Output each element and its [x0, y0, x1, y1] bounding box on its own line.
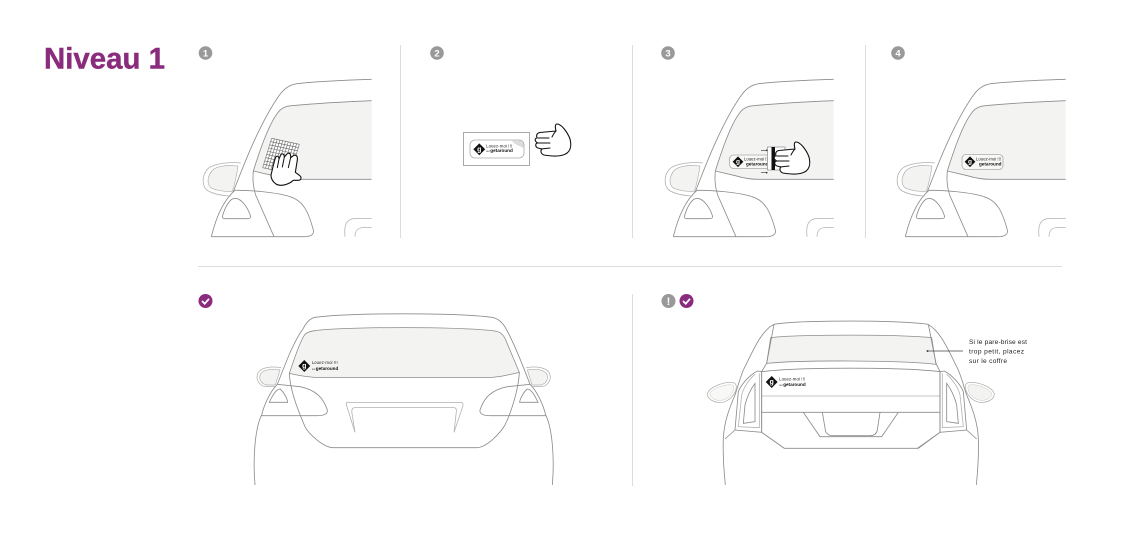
- small rear car illustration: [707, 321, 994, 485]
- sticker sheet: [464, 132, 530, 166]
- step 2 hand: [535, 124, 571, 156]
- step 3 panel: [661, 46, 834, 237]
- trunk logo: g: [770, 379, 774, 386]
- step 4 sticker: [962, 154, 1003, 170]
- trunk logo: sur: [779, 383, 783, 387]
- squeegee arrows: [761, 149, 768, 174]
- step 4 sticker: getaround: [979, 161, 1002, 166]
- step 3 car illustration: [665, 79, 834, 237]
- check badge: [198, 294, 212, 308]
- trunk logo: [766, 376, 806, 388]
- callout: Si le pare-brise est: [969, 339, 1027, 346]
- step 1 badge: [199, 46, 212, 60]
- sticker logo: g: [477, 147, 481, 154]
- rear window logo: g: [302, 363, 306, 370]
- step 2 panel: [430, 46, 571, 166]
- callout: sur le coffre: [969, 358, 1007, 365]
- callout: trop petit, placez: [969, 348, 1024, 355]
- step 1 car illustration: [203, 79, 372, 237]
- rear window logo: sur: [312, 367, 316, 371]
- step 4 car illustration: [897, 79, 1066, 237]
- warning badge: [662, 294, 676, 308]
- trunk logo: Louez-moi !!!: [779, 377, 805, 382]
- step 3 badge: 3: [665, 48, 671, 59]
- step 4 sticker: g: [968, 159, 972, 166]
- step 2 badge: [430, 46, 444, 60]
- step 1 hand: [271, 153, 301, 185]
- rear window logo: Louez-moi !!!: [312, 360, 338, 365]
- callout: [926, 339, 1027, 365]
- sticker logo: sur: [486, 149, 490, 153]
- trunk logo: getaround: [783, 382, 806, 387]
- step 3 hand: [774, 142, 810, 174]
- sticker logo: Louez-moi !!!: [486, 143, 512, 148]
- step 4 badge: 4: [895, 48, 901, 59]
- rear car illustration: [254, 314, 553, 485]
- step 4 sticker: Louez-moi !!!: [976, 157, 1001, 162]
- step 3 sticker: getaround: [746, 161, 769, 166]
- sticker logo: [473, 143, 513, 155]
- sticker logo: getaround: [490, 148, 513, 153]
- step 4 panel: [891, 46, 1066, 237]
- dividers: [198, 45, 1062, 486]
- panel: recommended placement on rear window: [198, 294, 553, 485]
- step 3 sticker: g: [736, 159, 740, 166]
- rear window logo: [298, 360, 338, 372]
- step 1 panel: [199, 46, 372, 237]
- panel: alternative placement on trunk: [662, 294, 1027, 485]
- title: Niveau 1: [44, 42, 165, 76]
- step 3 sticker: [730, 155, 786, 168]
- rear window logo: getaround: [316, 366, 338, 371]
- step 4 badge: [891, 46, 905, 60]
- warning badge: !: [667, 296, 670, 308]
- step 1 cleaning cloth: [263, 138, 299, 175]
- squeegee: [768, 147, 785, 170]
- check badge: [680, 294, 694, 308]
- step 3 badge: [661, 46, 675, 60]
- step 1 badge: 1: [203, 48, 209, 59]
- step 2 badge: 2: [434, 48, 440, 59]
- step 3 sticker: Louez-moi !!!: [744, 157, 769, 162]
